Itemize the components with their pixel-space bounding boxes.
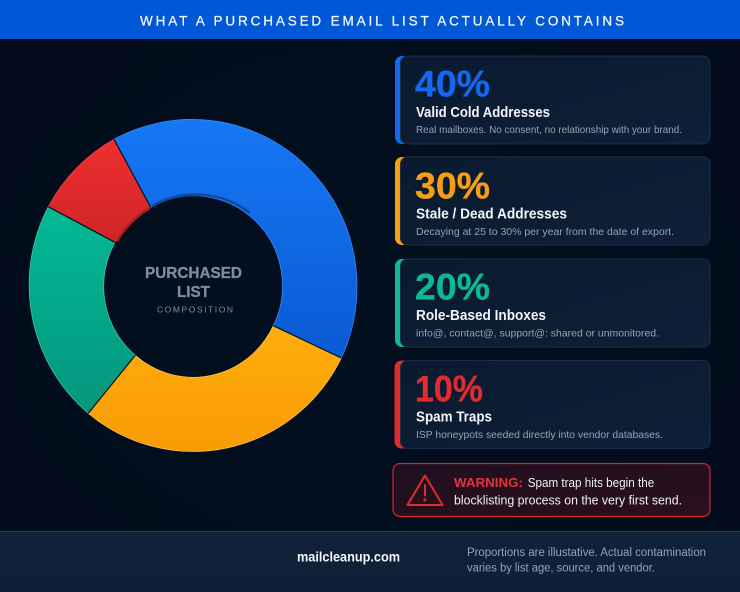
segment dividers — [48, 139, 341, 413]
segment: stale 30% — [88, 326, 341, 451]
centre label: PURCHASED — [145, 265, 242, 282]
centre label: COMPOSITION — [157, 305, 233, 315]
card: 30% stale addresses: Decaying at 25 to 30% per year from the date of export. — [416, 226, 674, 238]
warning callout — [393, 464, 710, 516]
card: 30% stale addresses: Stale / Dead Addresses — [416, 206, 567, 222]
header banner — [0, 0, 740, 39]
card: 40% valid cold addresses: Real mailboxes. No consent, no relationship with your brand. — [416, 124, 682, 136]
card: 40% valid cold addresses — [395, 56, 710, 144]
card: 20% role-based inboxes — [395, 259, 710, 347]
segment: spam traps 10% — [48, 139, 151, 242]
inner lip shading — [117, 195, 250, 241]
card: 40% valid cold addresses: 40% — [415, 64, 490, 105]
footer — [0, 531, 740, 592]
card: 40% valid cold addresses: Valid Cold Addresses — [416, 105, 550, 121]
card: 10% spam traps: Spam Traps — [416, 410, 492, 426]
donut chart — [29, 119, 357, 451]
card: 10% spam traps: ISP honeypots seeded directly into vendor databases. — [416, 429, 663, 441]
warning text: blocklisting process on the very first send. — [454, 493, 682, 507]
title: WHAT A PURCHASED EMAIL LIST ACTUALLY CONTAINS — [140, 14, 624, 28]
segment: valid cold 40% — [114, 119, 357, 358]
footer note: varies by list age, source, and vendor. — [467, 563, 655, 575]
footer note — [467, 547, 706, 575]
footer note: Proportions are illustative. Actual contamination — [467, 547, 706, 559]
warning text: WARNING: — [454, 476, 523, 490]
card: 20% role-based inboxes: info@, contact@, support@: shared or unmonitored. — [416, 328, 659, 340]
icon: warning triangle — [408, 476, 442, 505]
centre label: LIST — [177, 284, 211, 301]
card: 20% role-based inboxes: 20% — [415, 266, 490, 308]
card: 10% spam traps — [394, 360, 710, 448]
card: 30% stale addresses — [395, 157, 710, 245]
centre label — [145, 265, 242, 315]
warning text: Spam trap hits begin the — [528, 476, 654, 490]
warning text — [454, 476, 682, 507]
card: 20% role-based inboxes: Role-Based Inboxes — [416, 308, 546, 324]
card: 10% spam traps: 10% — [415, 369, 483, 410]
segment: role-based 20% — [29, 207, 135, 413]
card: 30% stale addresses: 30% — [415, 165, 490, 206]
footer brand: mailcleanup.com — [297, 550, 400, 564]
